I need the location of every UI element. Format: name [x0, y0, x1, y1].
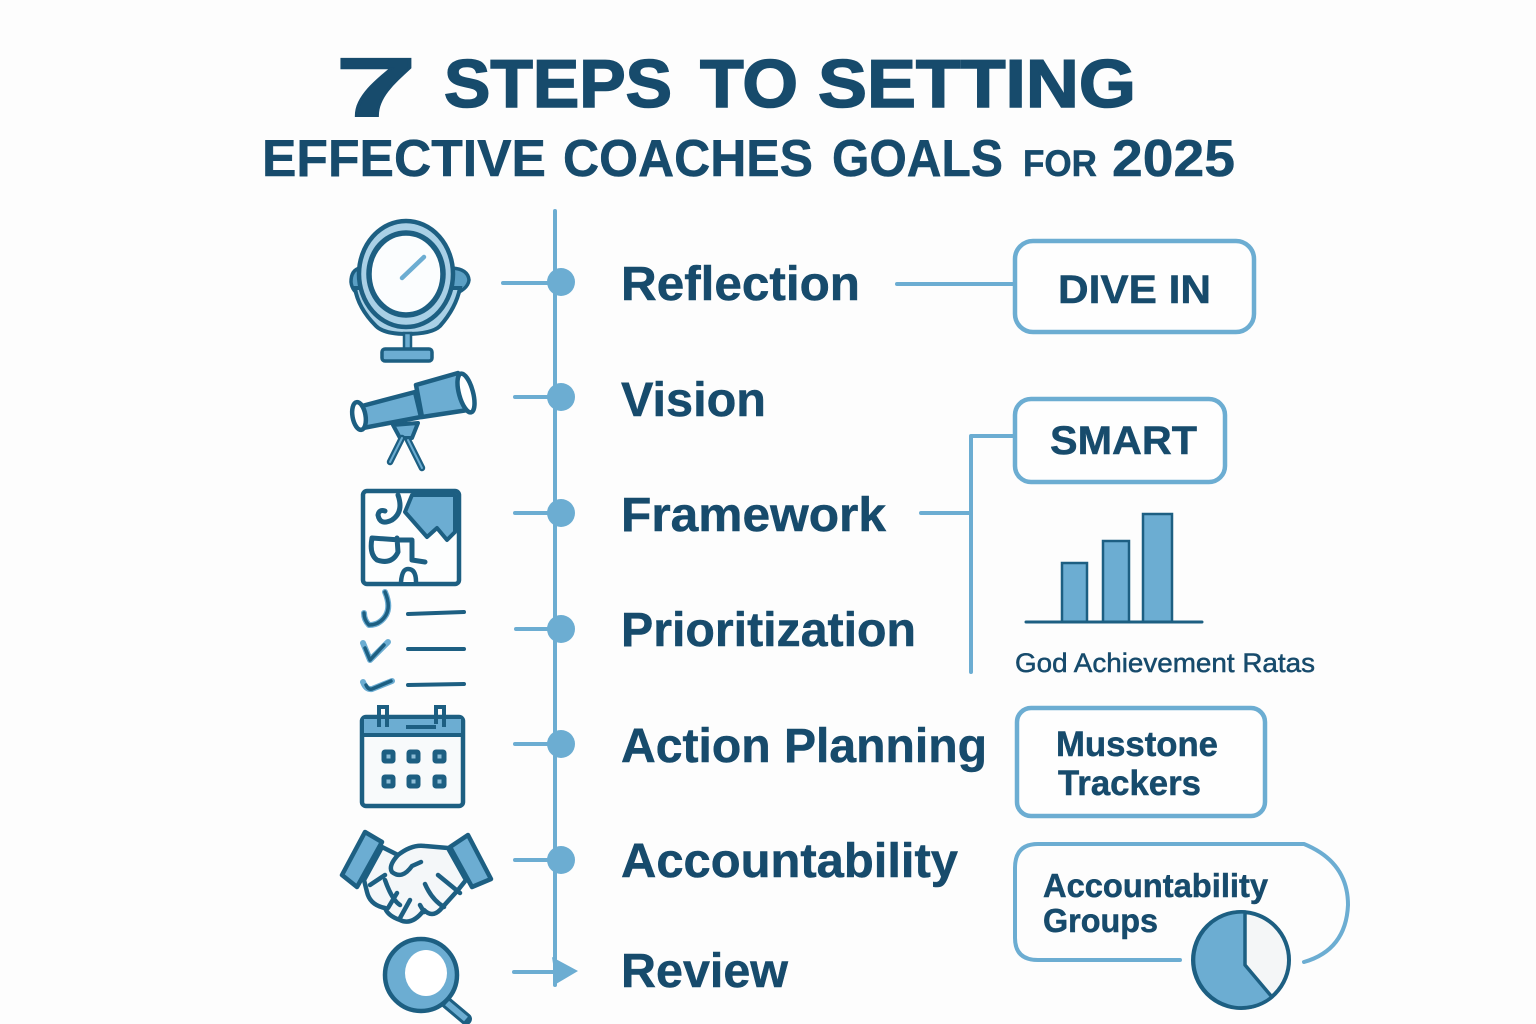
- title line 2: COACHES: [563, 130, 813, 188]
- step: Framework: Framework: [621, 489, 886, 542]
- callout: dive in: DIVE IN: [1058, 268, 1211, 312]
- callout: accountability groups: Accountability: [1043, 867, 1269, 904]
- step: Review: Review: [621, 945, 789, 998]
- callout: accountability groups: [1015, 844, 1348, 1008]
- callout: smart: [1015, 399, 1225, 482]
- connector: reflection to dive in: [897, 282, 1014, 286]
- title word: for: FOR: [1023, 143, 1097, 184]
- title line 2: EFFECTIVE: [262, 130, 546, 188]
- title line 1: SETTING: [818, 46, 1136, 122]
- title year: 2025: [1112, 130, 1235, 188]
- icon: telescope: [350, 372, 478, 468]
- title line 1: STEPS: [444, 46, 672, 122]
- step: Accountability: Accountability: [621, 835, 958, 888]
- step: Reflection: Reflection: [621, 258, 860, 311]
- chart caption: God Achievement Ratas: [1015, 648, 1315, 678]
- icon: checklist: [363, 592, 464, 689]
- title line 2: GOALS: [832, 130, 1003, 188]
- icon: calendar: [362, 707, 463, 806]
- icon: mirror: [351, 221, 469, 361]
- step connector 3: [515, 499, 575, 527]
- bar chart: goal achievement rates: [1026, 514, 1202, 622]
- step labels: [621, 258, 987, 998]
- step connector 5: [515, 730, 575, 758]
- title numeral 7: 7: [336, 41, 416, 134]
- pie chart: [1193, 912, 1289, 1008]
- callout: smart: SMART: [1050, 419, 1197, 463]
- icon: handshake: [342, 832, 491, 922]
- step connector 2: [515, 383, 575, 411]
- step: Vision: Vision: [621, 374, 766, 427]
- step connector 7 with arrow: [514, 957, 578, 984]
- icon: puzzle framework: [363, 491, 459, 584]
- step connector 6: [515, 846, 575, 874]
- callout: accountability groups: Groups: [1043, 902, 1158, 939]
- title: [262, 41, 1235, 188]
- step: Action Planning: Action Planning: [621, 720, 987, 773]
- timeline: [503, 211, 578, 985]
- callout: milestone trackers: [1017, 708, 1265, 816]
- callout: milestone trackers: Trackers: [1058, 764, 1201, 803]
- connector: framework bracket: [921, 436, 1014, 672]
- icon: magnifying glass: [385, 939, 466, 1019]
- step: Prioritization: Prioritization: [621, 604, 916, 657]
- title line 1: TO: [700, 46, 798, 122]
- step connector 4: [516, 615, 575, 643]
- step connector 1: [503, 268, 575, 296]
- timeline spine: [553, 211, 557, 985]
- callout: dive in: [1015, 241, 1254, 332]
- callout: milestone trackers: Musstone: [1056, 725, 1218, 764]
